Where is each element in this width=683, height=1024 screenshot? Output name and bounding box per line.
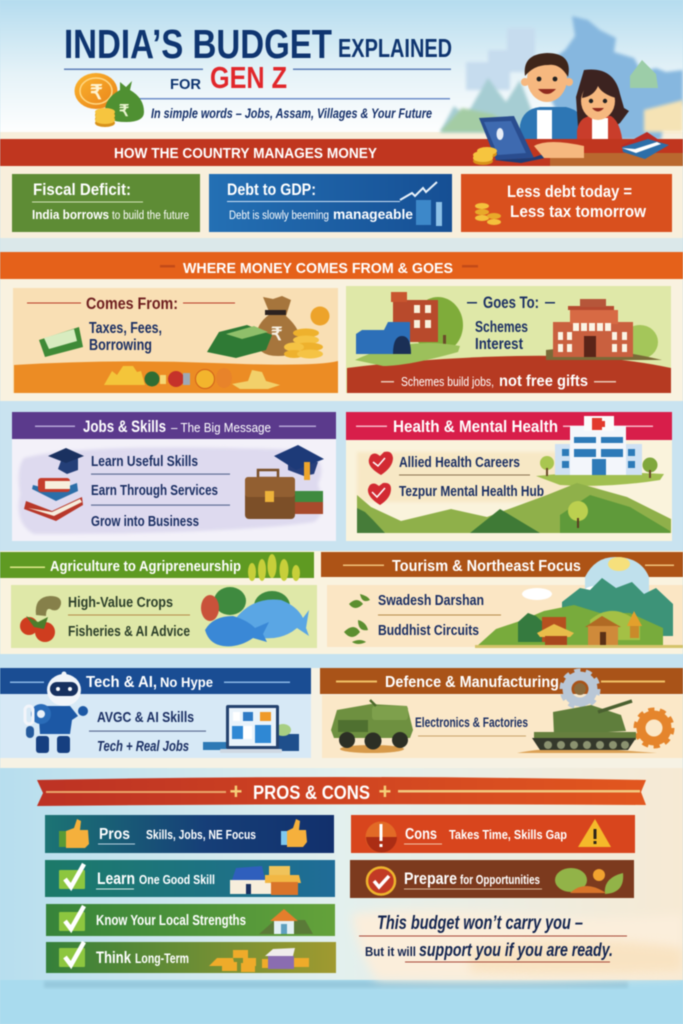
icon: rupee coin, money bag and coins: ₹ <box>119 103 129 120</box>
panel: goes to: not free gifts <box>499 373 588 390</box>
section heading: where money comes from and goes: WHERE MONEY COMES FROM & GOES <box>183 260 453 277</box>
icon: thumbs up blue cuff <box>281 819 307 847</box>
panel: agriculture to agripreneurship <box>0 552 317 648</box>
panel: tech and AI: AVGC & AI Skills <box>97 709 194 726</box>
panel: tourism and northeast focus: Tourism & Northeast Focus <box>392 558 581 575</box>
icon: robot <box>25 672 88 753</box>
section heading: where money comes from and goes <box>0 252 683 279</box>
panel: tech and AI: Tech & AI, <box>86 674 157 691</box>
icon row: gold, gems and coins <box>104 366 280 389</box>
title: FOR <box>170 76 201 93</box>
panel: debt to GDP: manageable <box>333 206 413 222</box>
panel: tech and AI <box>0 668 311 758</box>
row: prepare for opportunities: Prepare <box>404 870 457 888</box>
row: think long-term: Long-Term <box>135 951 189 966</box>
heading ribbon: pros and cons: + <box>378 779 391 804</box>
icon: tomatoes and sprout <box>20 596 61 642</box>
panel: defence and manufacturing <box>320 668 683 758</box>
title: GEN Z <box>210 60 287 95</box>
row: learn one good skill: Learn <box>97 869 135 888</box>
icon: stack of books <box>24 478 83 521</box>
row: cons <box>351 815 635 853</box>
icon: money bag, cash and coins: ₹ <box>271 324 283 344</box>
icon: orange gear <box>636 710 672 746</box>
row: think long-term: Think <box>96 948 131 967</box>
laptop, coins and books <box>473 116 669 165</box>
section heading: how the country manages money: HOW THE COUNTRY MANAGES MONEY <box>114 146 377 162</box>
illustration: red building and blue factory <box>355 292 463 366</box>
row: pros: Skills, Jobs, NE Focus <box>146 828 256 842</box>
panel: goes to: Interest <box>475 336 524 353</box>
icon: laptop with screen tiles <box>203 705 299 753</box>
row: cons: Cons <box>405 826 437 843</box>
panel: debt to GDP <box>209 174 452 232</box>
icon: grey gear <box>562 671 598 707</box>
panel: fiscal deficit <box>12 174 200 232</box>
panel: jobs and skills: Learn Useful Skills <box>91 454 198 470</box>
icon: banknotes <box>39 327 83 357</box>
illustration: green hills landscape <box>357 483 671 533</box>
India map <box>541 16 683 140</box>
panel: defence and manufacturing: Defence & Manufacturing <box>385 674 559 691</box>
panel: jobs and skills: Jobs & Skills <box>83 417 166 436</box>
panel: comes from: Taxes, Fees, <box>89 320 162 337</box>
panel: tourism and northeast focus: Buddhist Circuits <box>378 623 479 639</box>
closing message <box>352 910 683 981</box>
title: EXPLAINED <box>338 33 452 63</box>
row: prepare for opportunities: for Opportunities <box>460 872 540 887</box>
panel: jobs and skills: – The Big Message <box>171 420 271 435</box>
icon: rising debt chart <box>400 182 442 226</box>
icon: wheat <box>248 554 300 581</box>
boy <box>520 53 588 165</box>
icon: red hearts <box>368 452 393 505</box>
panel: agriculture to agripreneurship: High-Value Crops <box>68 595 173 611</box>
illustration: armoured vehicle <box>331 700 413 753</box>
illustration: northeast hills, sun and huts <box>475 557 683 648</box>
panel: health and mental health: Allied Health Careers <box>399 455 520 471</box>
panel: debt to GDP: Debt to GDP: <box>227 181 316 199</box>
panel: goes to <box>346 286 671 393</box>
icon: leaves and flower on soil <box>555 868 623 894</box>
illustration: brick institution <box>546 299 662 360</box>
icon: orange-roof cottage <box>259 909 313 934</box>
panel: health and mental health: Health & Mental Health <box>393 417 558 436</box>
icon: warning triangle <box>578 819 611 847</box>
panel: less debt today: Less debt today = <box>507 183 632 201</box>
icon: cap and briefcase with books <box>245 445 324 519</box>
panel: goes to: Goes To: <box>483 293 539 312</box>
closing message: This budget won’t carry you – <box>377 913 583 934</box>
panel: defence and manufacturing: Electronics & Factories <box>415 715 528 730</box>
city buildings <box>466 28 535 90</box>
panel: jobs and skills: Grow into Business <box>91 514 199 530</box>
icon: blue fish and leaves <box>201 587 309 646</box>
illustration: hospital <box>536 416 664 486</box>
subtitle: In simple words – Jobs, Assam, Villages & Your Future <box>151 106 432 121</box>
panel: goes to: Schemes <box>475 319 528 336</box>
panel: comes from: Comes From: <box>86 294 178 313</box>
closing message: support you if you are ready. <box>419 940 613 960</box>
panel: comes from: Borrowing <box>89 337 152 354</box>
row: prepare for opportunities <box>350 860 634 898</box>
panel: tourism and northeast focus <box>321 552 683 648</box>
panel: tech and AI: No Hype <box>160 674 213 690</box>
panel: comes from <box>13 288 338 393</box>
panel: agriculture to agripreneurship: Fisheries & AI Advice <box>68 624 190 640</box>
panel: fiscal deficit: Fiscal Deficit: <box>33 181 131 199</box>
row: learn one good skill <box>45 860 335 897</box>
hills <box>440 78 540 132</box>
title: INDIA’S BUDGET <box>64 21 332 67</box>
icon: blue-roof house and barn <box>230 866 301 895</box>
panel: health and mental health <box>346 412 672 541</box>
heading ribbon: pros and cons: + <box>230 779 242 804</box>
panel: fiscal deficit: India borrows <box>32 208 109 222</box>
girl <box>576 70 629 164</box>
panel: tech and AI: Tech + Real Jobs <box>97 738 189 755</box>
row: cons: Takes Time, Skills Gap <box>449 828 567 842</box>
panel: health and mental health: Tezpur Mental Health Hub <box>399 484 544 500</box>
row: think long-term <box>46 942 336 973</box>
panel: agriculture to agripreneurship: Agriculture to Agripreneurship <box>50 558 241 575</box>
panel: goes to: Schemes build jobs, <box>401 374 494 389</box>
icon: money bag, cash and coins <box>207 296 330 358</box>
panel: less debt today <box>461 174 672 232</box>
row: know your local strengths: Know Your Local Strengths <box>96 913 246 929</box>
panel: jobs and skills: Earn Through Services <box>91 483 218 499</box>
row: pros <box>45 815 334 853</box>
icon: gold bars and boxes <box>209 950 309 972</box>
row: learn one good skill: One Good Skill <box>139 872 215 887</box>
title <box>64 21 452 100</box>
panel: less debt today: Less tax tomorrow <box>510 203 646 221</box>
panel: tourism and northeast focus: Swadesh Darshan <box>378 593 484 609</box>
closing message: But it will <box>365 944 416 959</box>
icon: rupee coin, money bag and coins: ₹ <box>90 82 103 104</box>
heading ribbon: pros and cons: PROS & CONS <box>253 783 370 804</box>
header illustration: map, buildings and students <box>440 16 683 165</box>
heading ribbon: pros and cons <box>37 777 646 806</box>
row: pros: Pros <box>99 826 130 843</box>
icon: graduation cap <box>48 448 84 474</box>
panel: debt to GDP: Debt is slowly beeming <box>229 210 329 222</box>
section heading: how the country manages money <box>0 139 683 166</box>
icon: stacked parcel <box>265 948 295 969</box>
panel: fiscal deficit: to build the future <box>112 210 189 222</box>
panel: jobs and skills <box>12 412 336 541</box>
icon: gold coins <box>475 203 501 225</box>
row: know your local strengths <box>46 904 335 936</box>
illustration: tank <box>517 701 657 753</box>
icon: green leaves <box>344 594 370 644</box>
icon: thumbs up <box>59 819 89 848</box>
icon: rupee coin, money bag and coins <box>74 73 144 127</box>
